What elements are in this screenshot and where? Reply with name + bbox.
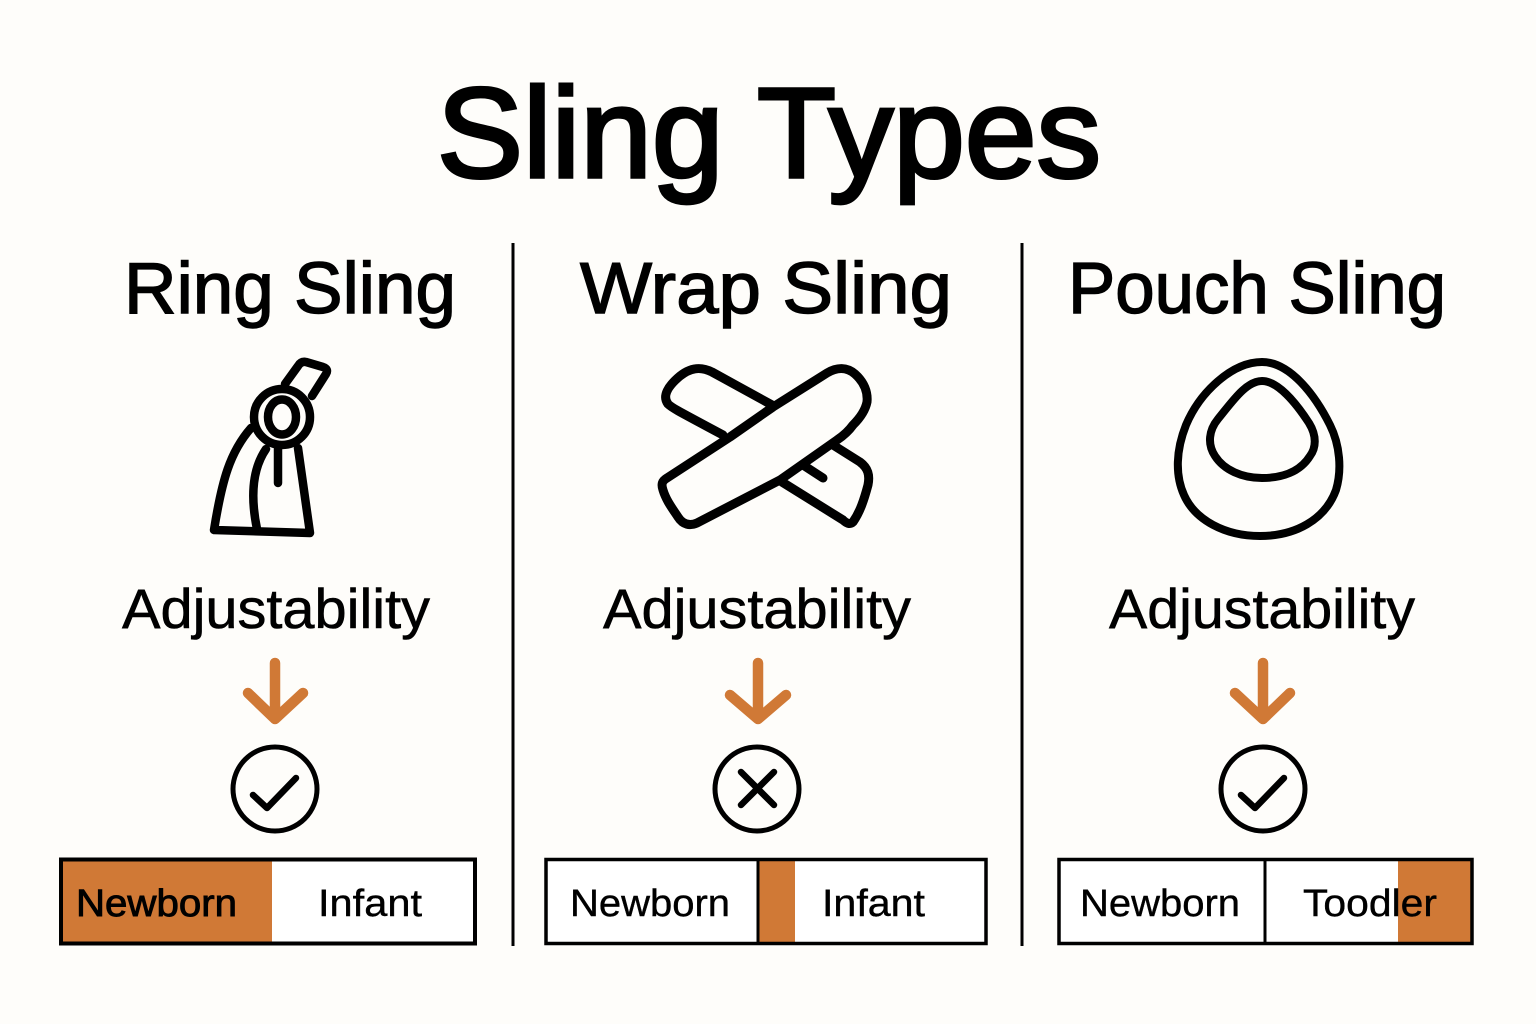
icon: wrap sling	[662, 369, 869, 525]
arrow: down	[1235, 663, 1290, 719]
title: Sling Types	[437, 62, 1101, 205]
label: adjustability: Adjustability	[603, 577, 911, 640]
age bar: newborn to infant: Newborn	[76, 883, 237, 925]
heading: wrap sling: Wrap Sling	[580, 249, 952, 329]
age bar: newborn to toddler: Newborn	[1080, 883, 1240, 925]
age bar: newborn to infant	[61, 860, 475, 944]
icon: check in circle	[233, 747, 317, 831]
arrow: down	[730, 663, 786, 719]
label: adjustability: Adjustability	[122, 577, 430, 640]
heading: ring sling: Ring Sling	[124, 249, 456, 329]
age bar: newborn to infant	[546, 860, 986, 944]
icon: check in circle	[1221, 747, 1305, 831]
age bar: newborn to toddler: Toodler	[1303, 883, 1437, 925]
heading: pouch sling: Pouch Sling	[1068, 249, 1446, 329]
age bar: newborn to toddler	[1059, 860, 1472, 944]
age bar: newborn to infant: Infant	[822, 883, 925, 925]
age bar: newborn to infant: Newborn	[570, 883, 730, 925]
arrow: down	[248, 663, 303, 719]
panel: ring sling	[61, 249, 475, 944]
icon: cross in circle	[715, 747, 799, 831]
panel: wrap sling	[546, 249, 986, 944]
label: adjustability: Adjustability	[1109, 577, 1415, 640]
panel: pouch sling	[1059, 249, 1472, 944]
icon: ring sling	[214, 362, 327, 533]
age bar: newborn to infant: Infant	[318, 883, 422, 925]
icon: pouch sling	[1178, 362, 1339, 536]
